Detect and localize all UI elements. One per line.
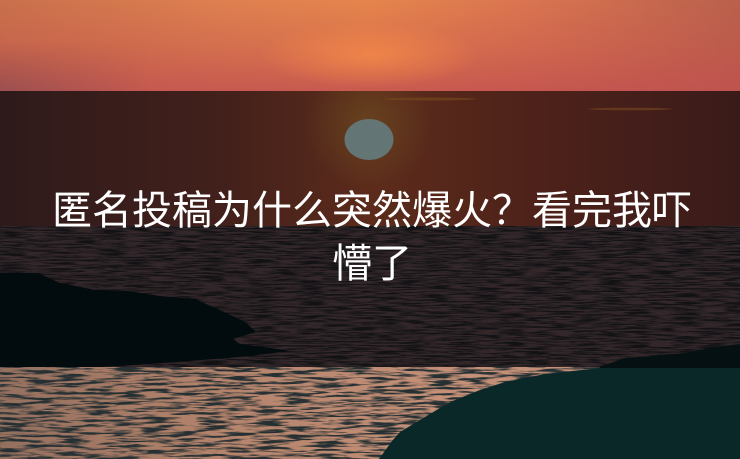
right far shore — [600, 344, 740, 368]
sun — [344, 119, 394, 160]
title: 懵了 — [332, 242, 412, 286]
left island silhouette — [0, 273, 290, 367]
upper water — [0, 226, 740, 368]
lower bright water — [0, 367, 740, 459]
darkened upper band with sun — [0, 91, 740, 227]
sky — [0, 0, 740, 92]
thin clouds — [384, 98, 672, 110]
right foreground headland — [379, 368, 740, 459]
title — [52, 189, 692, 286]
title: 匿名投稿为什么突然爆火？看完我吓 — [52, 189, 692, 233]
